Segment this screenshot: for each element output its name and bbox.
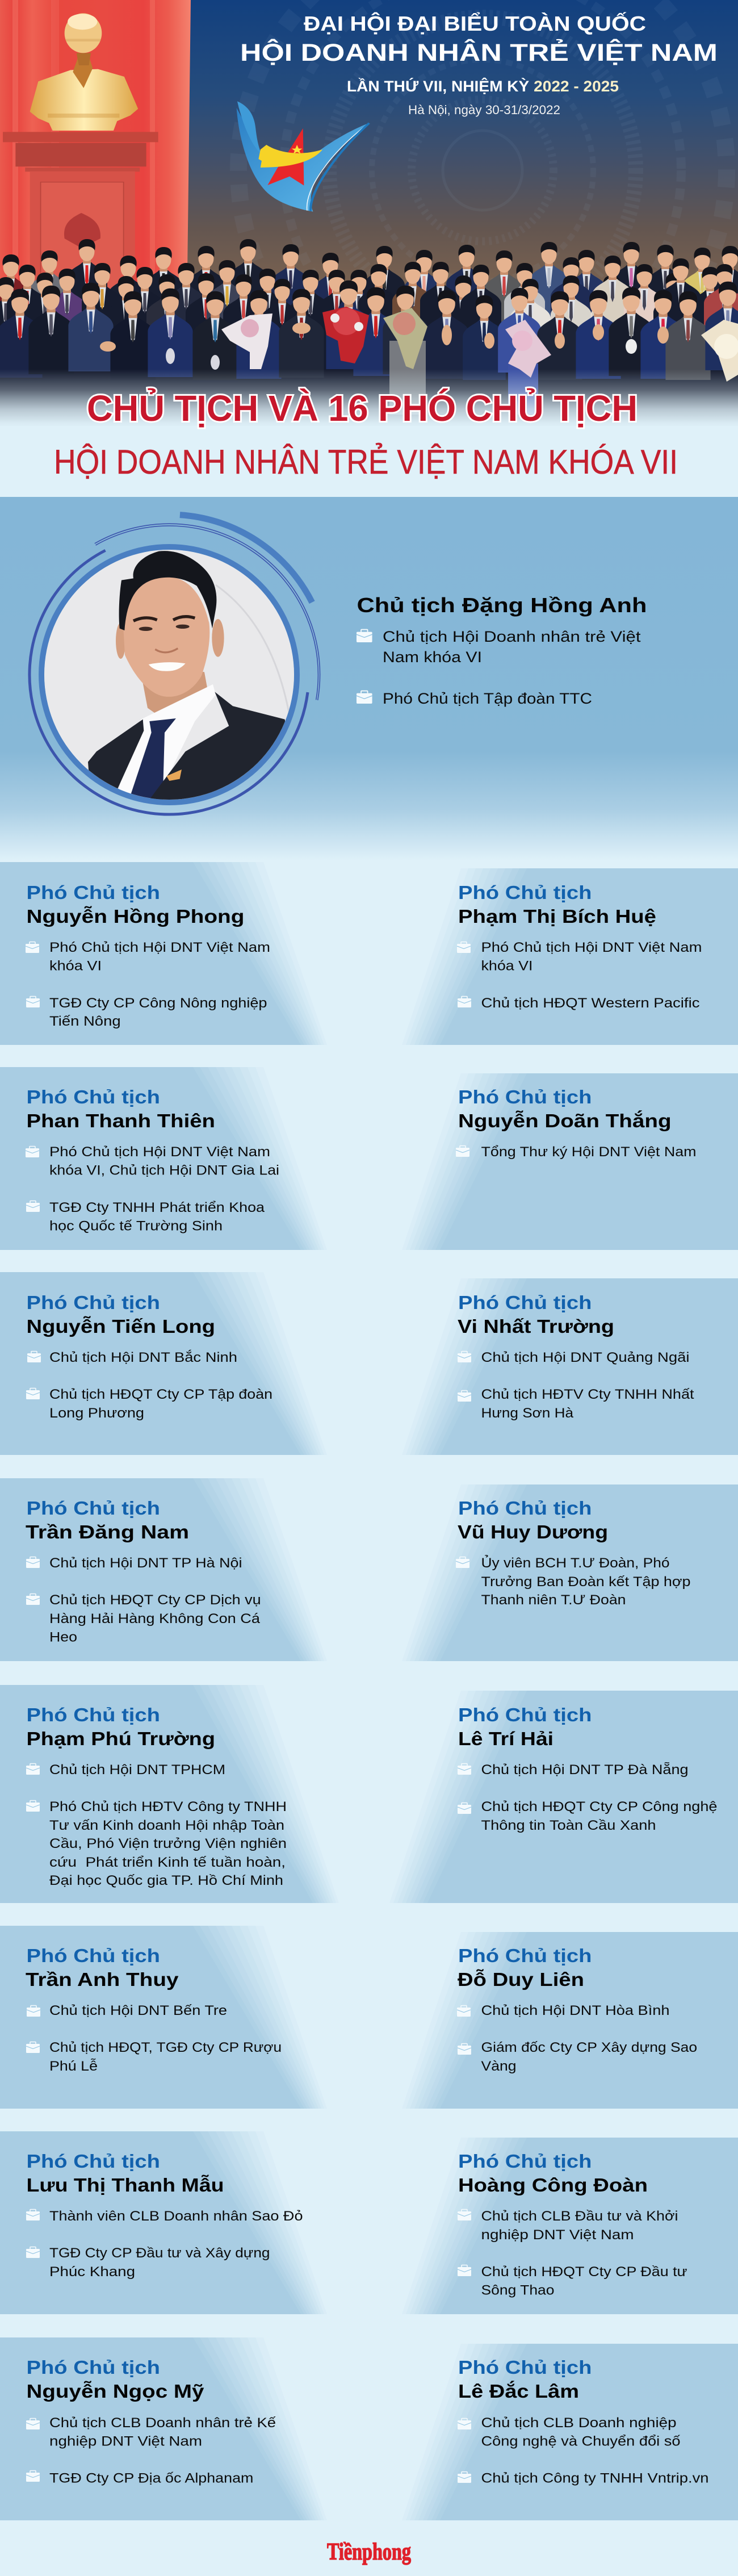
- position 2: Chủ tịch HĐQT Cty CP Dịch vụ: [49, 1592, 261, 1608]
- position 1: Trưởng Ban Đoàn kết Tập hợp: [481, 1574, 690, 1590]
- panel: Nguyễn Hồng Phong: [0, 862, 327, 1045]
- decorative rings: [30, 515, 320, 814]
- position 2: TGĐ Cty CP Địa ốc Alphanam: [49, 2470, 253, 2486]
- panel: Lê Trí Hải: [389, 1691, 738, 1903]
- front row of delegates: [0, 281, 738, 380]
- panel: Lê Đắc Lâm: [402, 2344, 738, 2520]
- position 2: Thông tin Toàn Cầu Xanh: [481, 1818, 656, 1833]
- position 1: Chủ tịch CLB Doanh nghiệp: [481, 2415, 677, 2431]
- position 2: [458, 2040, 697, 2074]
- panel: Vũ Huy Dương: [402, 1484, 738, 1661]
- title line 2: HỘI DOANH NHÂN TRẺ VIỆT NAM: [240, 39, 718, 66]
- role label: Phó Chủ tịch: [458, 1292, 592, 1313]
- position 1: Chủ tịch Hội DNT Bắc Ninh: [49, 1350, 237, 1365]
- name: Lưu Thị Thanh Mẫu: [26, 2174, 224, 2196]
- position 1: Chủ tịch CLB Doanh nhân trẻ Kế: [49, 2415, 276, 2431]
- position 1: [26, 940, 270, 974]
- position 2: [458, 1387, 694, 1421]
- position 2: [458, 2264, 687, 2298]
- stage screen backdrop: [184, 0, 738, 415]
- white-gowned woman: [389, 341, 426, 415]
- position 2: Chủ tịch HĐQT Cty CP Công nghệ: [481, 1799, 718, 1814]
- position 2: TGĐ Cty CP Đầu tư và Xây dựng: [49, 2245, 270, 2261]
- name: Vi Nhất Trường: [458, 1316, 614, 1337]
- name: Trần Anh Thuy: [26, 1969, 179, 1990]
- role label: Phó Chủ tịch: [26, 1086, 160, 1107]
- panel: Vi Nhất Trường: [402, 1278, 738, 1455]
- position 2: Chủ tịch HĐTV Cty TNHH Nhất: [481, 1387, 694, 1402]
- position 2: [26, 1799, 287, 1888]
- main heading: [54, 387, 678, 481]
- panel: chairman: [0, 497, 738, 860]
- name: Đỗ Duy Liên: [458, 1969, 584, 1990]
- position 2: Chủ tịch HĐQT Cty CP Đầu tư: [481, 2264, 687, 2280]
- position 1: [456, 1554, 690, 1608]
- position 2: Phó Chủ tịch HĐTV Công ty TNHH: [49, 1799, 287, 1814]
- position 2: [26, 1200, 265, 1233]
- position 1: Chủ tịch Hội DNT TP Đà Nẵng: [481, 1762, 688, 1778]
- role label: Phó Chủ tịch: [26, 1292, 160, 1313]
- panel: Nguyễn Ngọc Mỹ: [0, 2337, 327, 2520]
- panel: Nguyễn Tiến Long: [0, 1272, 327, 1455]
- name: Nguyễn Tiến Long: [26, 1316, 215, 1337]
- role label: Phó Chủ tịch: [458, 1945, 592, 1966]
- position 2: [26, 2040, 282, 2074]
- chairman role 1: Nam khóa VI: [383, 649, 482, 666]
- position 2: Hàng Hải Hàng Không Con Cá: [49, 1611, 261, 1626]
- role label: Phó Chủ tịch: [26, 1498, 160, 1519]
- panel: Nguyễn Doãn Thắng: [402, 1073, 738, 1250]
- position 1: nghiệp DNT Việt Nam: [481, 2227, 634, 2243]
- position 1: [458, 2415, 680, 2449]
- position 1: [26, 1144, 279, 1178]
- congress title block: [240, 11, 718, 117]
- crowd of delegates: [0, 239, 738, 426]
- fade into page background: [0, 369, 738, 429]
- heading line 1: CHỦ TỊCH VÀ 16 PHÓ CHỦ TỊCH: [87, 387, 638, 429]
- position 2: Chủ tịch Công ty TNHH Vntrip.vn: [481, 2470, 708, 2486]
- role label: Phó Chủ tịch: [26, 2357, 160, 2378]
- position 2: cứu Phát triển Kinh tế tuần hoàn,: [49, 1855, 286, 1870]
- position 2: [26, 1592, 261, 1645]
- role label: Phó Chủ tịch: [26, 2151, 160, 2172]
- position 2: Phú Lễ: [49, 2059, 98, 2074]
- role label: Phó Chủ tịch: [26, 882, 160, 903]
- chairman role 2: Phó Chủ tịch Tập đoàn TTC: [383, 690, 592, 707]
- position 2: Heo: [49, 1630, 77, 1645]
- position 2: Chủ tịch HĐQT Cty CP Tập đoàn: [49, 1387, 272, 1402]
- position 1: Chủ tịch Hội DNT Quảng Ngãi: [481, 1350, 689, 1365]
- place and date: Hà Nội, ngày 30-31/3/2022: [408, 103, 560, 117]
- panel: Phan Thanh Thiên: [0, 1067, 327, 1250]
- name: Phạm Phú Trường: [26, 1728, 215, 1749]
- red curtain: [0, 0, 191, 318]
- position 2: Tiến Nông: [49, 1014, 121, 1029]
- position 2: Đại học Quốc gia TP. Hồ Chí Minh: [49, 1873, 283, 1888]
- role label: Phó Chủ tịch: [26, 1704, 160, 1725]
- position 2: Vàng: [481, 2059, 517, 2074]
- position 2: [26, 2245, 270, 2280]
- position 2: Giám đốc Cty CP Xây dựng Sao: [481, 2040, 697, 2055]
- position 2: Phúc Khang: [49, 2264, 135, 2280]
- role label: Phó Chủ tịch: [26, 1945, 160, 1966]
- position 1: Chủ tịch Hội DNT TPHCM: [49, 1762, 225, 1778]
- panel: Trần Đăng Nam: [0, 1478, 327, 1661]
- position 1: [457, 940, 702, 974]
- name: Vũ Huy Dương: [458, 1521, 608, 1542]
- title line 3: LẦN THỨ VII, NHIỆM KỲ 2022 - 2025: [347, 77, 619, 95]
- chairman role 1: [357, 628, 641, 666]
- congress logo: [237, 101, 369, 212]
- position 2: [26, 996, 267, 1029]
- position 2: Long Phương: [49, 1406, 144, 1421]
- role label: Phó Chủ tịch: [458, 1086, 592, 1107]
- footer logo: Tiền Phong: Tiềnphong: [327, 2539, 411, 2565]
- position 1: khóa VI: [49, 959, 102, 974]
- position 1: Thành viên CLB Doanh nhân Sao Đỏ: [49, 2209, 303, 2224]
- panel: Lưu Thị Thanh Mẫu: [0, 2131, 327, 2314]
- position 1: Thanh niên T.Ư Đoàn: [481, 1592, 626, 1608]
- role label: Phó Chủ tịch: [458, 2357, 592, 2378]
- clapping hands: [100, 323, 669, 370]
- back row of delegates: [0, 239, 738, 336]
- panel: Phạm Phú Trường: [0, 1685, 339, 1903]
- position 1: Chủ tịch Hội DNT Hòa Bình: [481, 2003, 670, 2018]
- hero photo: congress stage: [0, 0, 738, 429]
- name: Phạm Thị Bích Huệ: [458, 906, 656, 927]
- name: Phan Thanh Thiên: [26, 1110, 215, 1131]
- panel: Đỗ Duy Liên: [402, 1932, 738, 2109]
- bouquets: [221, 307, 738, 382]
- position 2: Chủ tịch HĐQT, TGĐ Cty CP Rượu: [49, 2040, 282, 2055]
- name: Nguyễn Doãn Thắng: [458, 1110, 672, 1131]
- panel: Phạm Thị Bích Huệ: [402, 868, 738, 1045]
- role label: Phó Chủ tịch: [458, 1704, 592, 1725]
- position 2: TGĐ Cty CP Công Nông nghiệp: [49, 996, 267, 1011]
- position 2: học Quốc tế Trường Sinh: [49, 1218, 223, 1233]
- position 1: Phó Chủ tịch Hội DNT Việt Nam: [481, 940, 702, 955]
- panel: Trần Anh Thuy: [0, 1926, 327, 2109]
- role label: Phó Chủ tịch: [458, 882, 592, 903]
- position 1: Chủ tịch Hội DNT Bến Tre: [49, 2003, 227, 2018]
- position 2: Tư vấn Kinh doanh Hội nhập Toàn: [49, 1818, 284, 1833]
- name: Lê Trí Hải: [458, 1728, 554, 1749]
- position 1: [458, 2209, 678, 2243]
- position 2: [26, 1387, 272, 1421]
- position 1: nghiệp DNT Việt Nam: [49, 2434, 202, 2449]
- portrait: [40, 545, 299, 805]
- position 1: Chủ tịch CLB Đầu tư và Khởi: [481, 2209, 678, 2224]
- name: Nguyễn Ngọc Mỹ: [26, 2381, 204, 2402]
- panel: Hoàng Công Đoàn: [402, 2138, 738, 2314]
- role label: Phó Chủ tịch: [458, 1498, 592, 1519]
- bust statue on pedestal: [3, 13, 158, 323]
- position 1: Chủ tịch Hội DNT TP Hà Nội: [49, 1555, 242, 1571]
- position 2: Cầu, Phó Viện trưởng Viện nghiên: [49, 1836, 287, 1851]
- chairman name: Chủ tịch Đặng Hồng Anh: [357, 593, 647, 617]
- name: Hoàng Công Đoàn: [458, 2174, 648, 2196]
- position 2: Hưng Sơn Hà: [481, 1406, 574, 1421]
- name: Nguyễn Hồng Phong: [26, 906, 244, 927]
- position 2: Chủ tịch HĐQT Western Pacific: [481, 996, 699, 1011]
- position 2: Sông Thao: [481, 2283, 554, 2298]
- position 1: Tổng Thư ký Hội DNT Việt Nam: [481, 1144, 696, 1160]
- name: Trần Đăng Nam: [26, 1521, 189, 1542]
- chairman role 1: Chủ tịch Hội Doanh nhân trẻ Việt: [383, 628, 641, 645]
- position 1: Phó Chủ tịch Hội DNT Việt Nam: [49, 1144, 270, 1160]
- middle row of delegates: [0, 256, 738, 359]
- position 2: [458, 1799, 718, 1833]
- position 1: khóa VI: [481, 959, 532, 974]
- position 1: Công nghệ và Chuyển đổi số: [481, 2434, 680, 2449]
- position 1: Phó Chủ tịch Hội DNT Việt Nam: [49, 940, 270, 955]
- name: Lê Đắc Lâm: [458, 2381, 579, 2402]
- position 1: khóa VI, Chủ tịch Hội DNT Gia Lai: [49, 1163, 279, 1178]
- title line 1: ĐẠI HỘI ĐẠI BIỂU TOÀN QUỐC: [304, 11, 646, 35]
- position 1: Ủy viên BCH T.Ư Đoàn, Phó: [481, 1554, 670, 1571]
- role label: Phó Chủ tịch: [458, 2151, 592, 2172]
- position 2: TGĐ Cty TNHH Phát triển Khoa: [49, 1200, 265, 1215]
- woman in blue dress: [508, 363, 538, 415]
- heading line 2: HỘI DOANH NHÂN TRẺ VIỆT NAM KHÓA VII: [54, 443, 678, 481]
- position 1: [26, 2415, 276, 2449]
